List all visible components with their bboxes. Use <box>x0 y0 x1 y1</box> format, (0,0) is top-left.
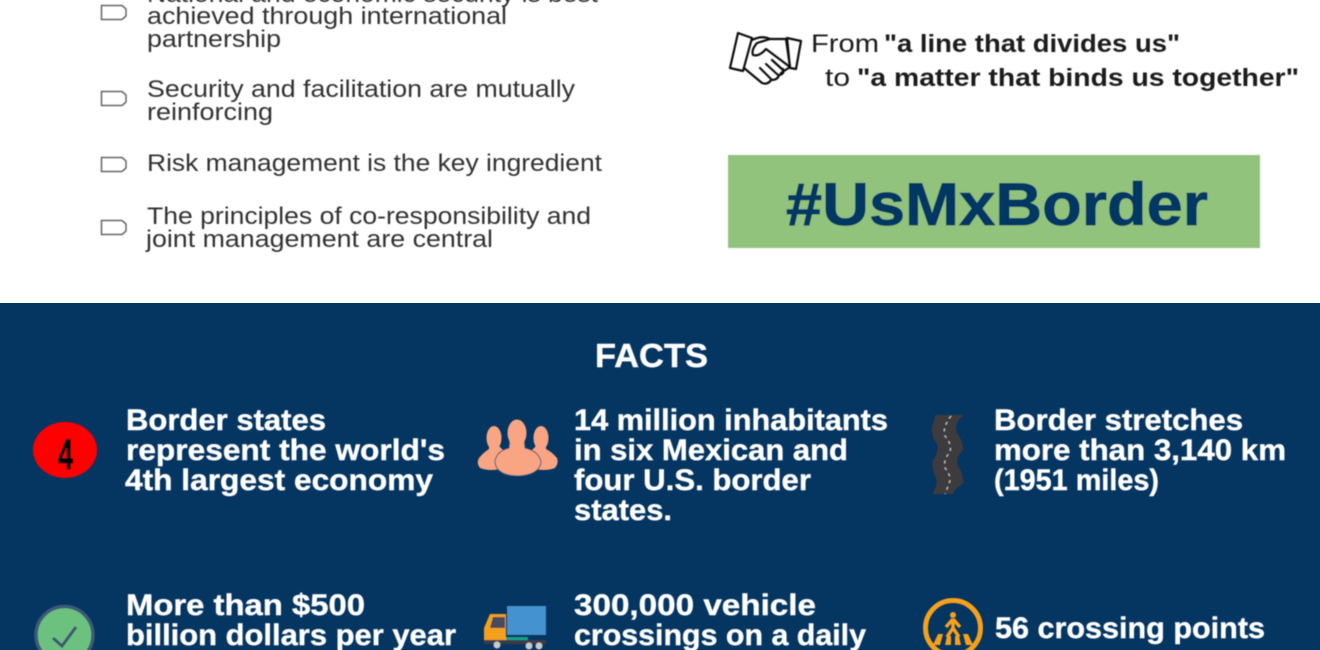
page background <box>0 0 1320 303</box>
bullet: national security <box>102 6 126 20</box>
fact: vehicle crossings <box>574 589 866 650</box>
text: security and facilitation: reinforcing <box>147 99 273 126</box>
fact: 4th largest economy <box>125 404 445 497</box>
text: security and facilitation <box>147 76 575 126</box>
bullet: co-responsibility <box>102 220 126 234</box>
fact: border length: (1951 miles) <box>994 464 1159 497</box>
text: national security: achieved through international <box>147 3 507 30</box>
quote: divides to binds <box>811 30 1299 92</box>
icon: truck <box>484 606 546 650</box>
fact: 500 billion: More than $500 <box>126 589 365 622</box>
fact: crossing points: 56 crossing points <box>995 612 1265 645</box>
fact: inhabitants <box>574 404 888 527</box>
fact: 4th largest economy: represent the world's <box>126 434 445 467</box>
hashtag banner: #UsMxBorder <box>786 171 1208 238</box>
quote: divides to binds: From <box>811 30 879 58</box>
fact: border length: more than 3,140 km <box>994 434 1286 467</box>
panel: facts <box>0 303 1320 650</box>
text: national security: partnership <box>147 26 281 53</box>
panel: principles list <box>102 0 602 253</box>
icon: red circle with 4 <box>33 422 97 479</box>
text: co-responsibility: The principles of co-responsibility and <box>147 203 591 230</box>
text: risk management: Risk management is the key ingredient <box>147 150 602 177</box>
quote: divides to binds: to <box>825 64 850 92</box>
fact: inhabitants: 14 million inhabitants <box>574 404 888 437</box>
fact: 4th largest economy: 4th largest economy <box>125 464 433 497</box>
icon: winding road <box>932 415 964 494</box>
icon: people group <box>478 420 558 476</box>
icon: green check <box>36 606 93 650</box>
fact: inhabitants: states. <box>574 494 672 527</box>
fact: border length: Border stretches <box>994 404 1243 437</box>
fact: vehicle crossings: 300,000 vehicle <box>574 589 816 622</box>
icon: red circle with 4: 4 <box>58 431 73 479</box>
fact: 4th largest economy: Border states <box>126 404 326 437</box>
quote: divides to binds: "a matter that binds us together" <box>857 64 1299 92</box>
bullet: security and facilitation <box>102 92 126 106</box>
fact: border length <box>994 404 1286 497</box>
text: co-responsibility <box>145 203 591 253</box>
quote: divides to binds: "a line that divides us" <box>884 30 1180 58</box>
heading: facts: FACTS <box>595 337 708 374</box>
icon: handshake <box>730 33 801 84</box>
fact: inhabitants: in six Mexican and <box>574 434 848 467</box>
text: security and facilitation: Security and facilitation are mutually <box>147 76 575 103</box>
text: co-responsibility: joint management are central <box>145 226 493 253</box>
hashtag banner <box>728 155 1260 248</box>
facts background <box>0 303 1320 650</box>
icon: pedestrian crossing <box>926 600 980 650</box>
text: national security <box>147 0 598 53</box>
fact: inhabitants: four U.S. border <box>574 464 811 497</box>
bullet: risk management <box>102 158 126 172</box>
fact: 500 billion <box>126 589 456 650</box>
